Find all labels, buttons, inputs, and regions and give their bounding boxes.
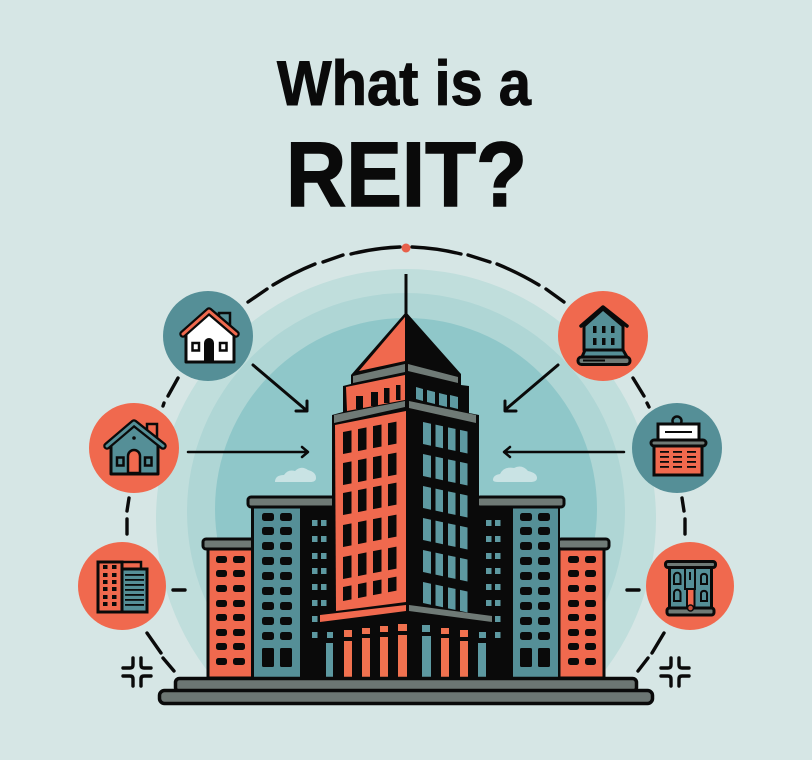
upper tier windows	[356, 385, 458, 409]
icon: teal house on coral circle	[89, 403, 179, 493]
icon: townhouse on coral circle	[646, 542, 734, 630]
icon: office desk block on teal circle	[632, 403, 722, 493]
main coral face	[335, 411, 406, 611]
icon: apartment blocks on coral circle	[78, 542, 166, 630]
orbit red dot	[402, 244, 410, 252]
title: REIT?	[286, 124, 527, 226]
clouds	[275, 467, 537, 482]
sparkle right	[661, 658, 689, 686]
tower silhouette	[320, 312, 492, 678]
central tower	[320, 274, 492, 678]
mid grey bands	[334, 401, 476, 423]
coral face windows	[343, 422, 396, 601]
side building: right teal with black wing	[477, 497, 564, 678]
icon: white house on teal circle	[163, 291, 253, 381]
spire	[404, 274, 408, 314]
podium columns	[326, 624, 486, 677]
sparkle left	[123, 658, 151, 686]
roof grey bands	[353, 364, 458, 383]
arrows pointing to the tower	[188, 365, 624, 457]
upper tier coral face	[346, 375, 405, 411]
title: What is a	[277, 49, 532, 119]
side building: right coral	[558, 539, 609, 678]
side building: left coral	[203, 539, 255, 678]
title	[277, 49, 532, 226]
icon: civic building on coral circle	[558, 291, 648, 381]
black face windows	[423, 422, 468, 612]
coral roof	[359, 317, 405, 371]
dashed orbit	[127, 247, 685, 671]
concentric background circles	[156, 269, 656, 670]
podium bands	[320, 605, 406, 622]
ground plinth	[160, 678, 652, 704]
side building: left teal with black wing	[248, 497, 336, 678]
